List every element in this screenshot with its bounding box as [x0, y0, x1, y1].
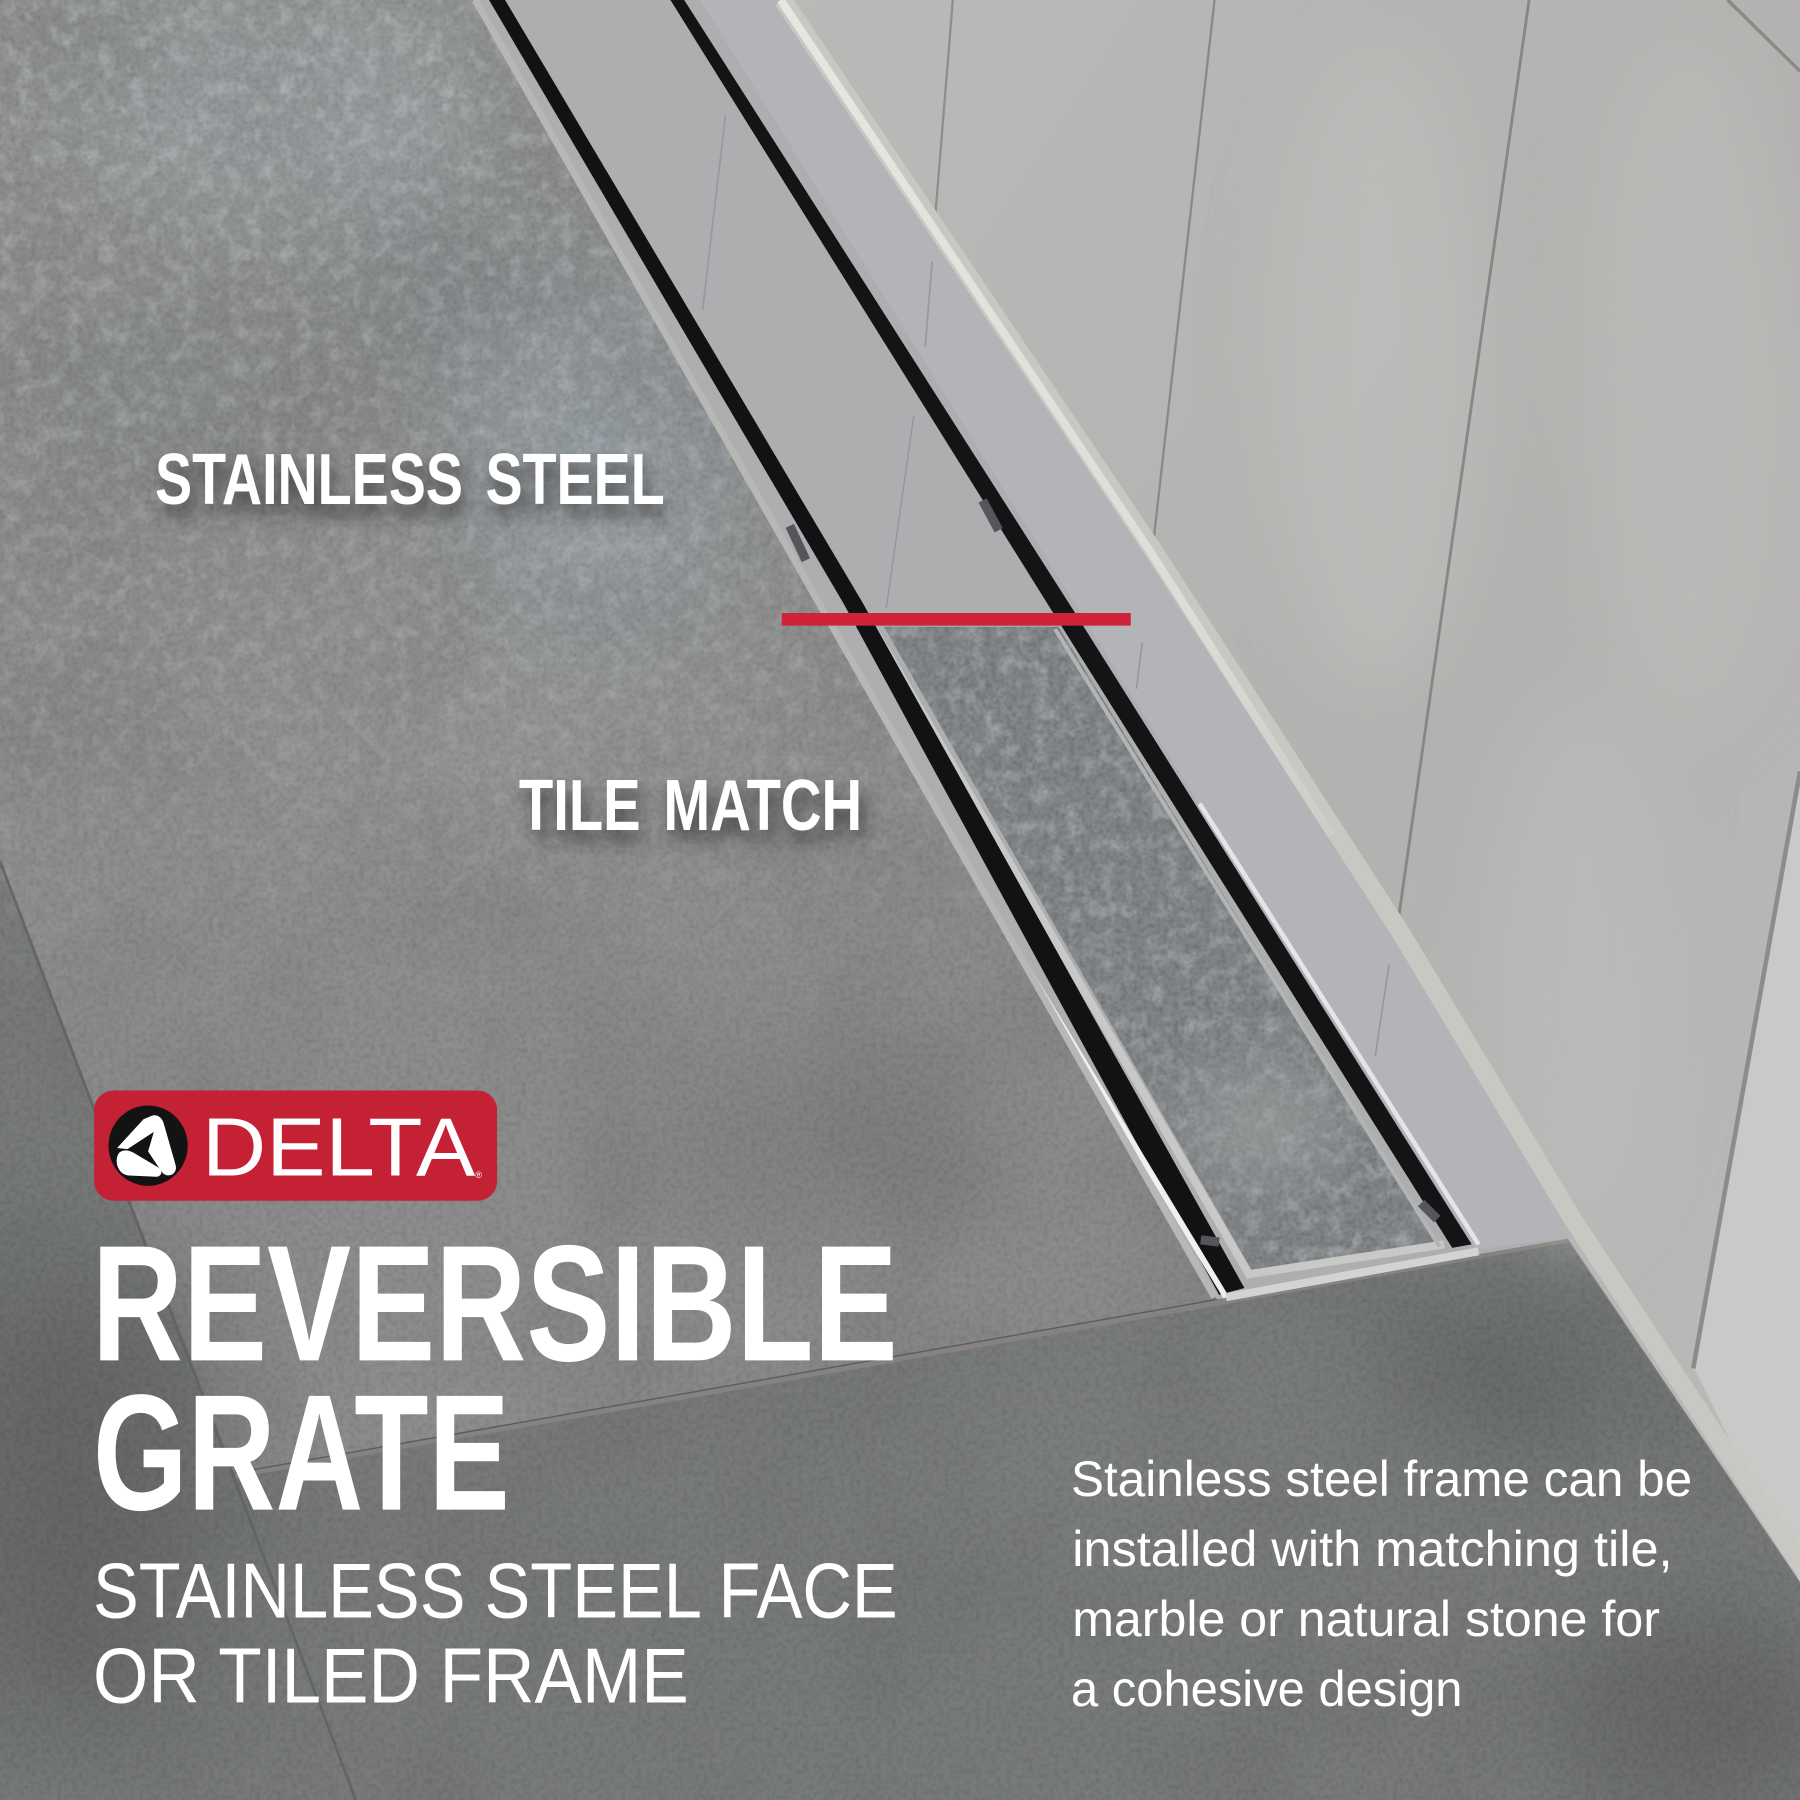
logo: Delta [94, 1091, 497, 1201]
title: REVERSIBLE [92, 1211, 898, 1396]
left drain slot [489, 0, 1244, 1295]
tile match insert [884, 627, 1437, 1270]
soft wall shading [1274, 34, 1791, 1251]
logo: Delta: ® [475, 1170, 482, 1180]
linear drain [473, 0, 1575, 1299]
steel face tile joints [703, 115, 1389, 1056]
subtitle [93, 1546, 898, 1719]
description text: a cohesive design [1071, 1660, 1463, 1717]
steel band beside wall [473, 0, 1575, 1299]
wall base grout strip [781, 0, 1800, 1564]
lower wall highlight [1693, 769, 1800, 1582]
subtitle: OR TILED FRAME [93, 1631, 689, 1719]
title: GRATE [93, 1361, 510, 1546]
description text: Stainless steel frame can be [1071, 1450, 1692, 1507]
wall tiles [778, 0, 1800, 1582]
right drain slot [670, 0, 1472, 1248]
callout: tile match: TILE MATCH [519, 766, 862, 846]
description text [1071, 1450, 1692, 1717]
chrome outer edges [1015, 947, 1226, 1297]
upper floor tile [0, 0, 1217, 1475]
red divider bar [782, 613, 1131, 626]
slot clips [790, 501, 1437, 1242]
description text: marble or natural stone for [1072, 1590, 1660, 1647]
description text: installed with matching tile, [1072, 1520, 1673, 1577]
callout: stainless steel: STAINLESS STEEL [155, 440, 665, 520]
insert frame edges [874, 629, 1444, 1274]
icon: Delta triangle emblem [108, 1105, 188, 1186]
subtitle: STAINLESS STEEL FACE [93, 1546, 898, 1634]
title [92, 1211, 898, 1546]
floor grout seams [235, 1240, 1567, 1475]
logo: Delta: DELTA [202, 1101, 475, 1194]
